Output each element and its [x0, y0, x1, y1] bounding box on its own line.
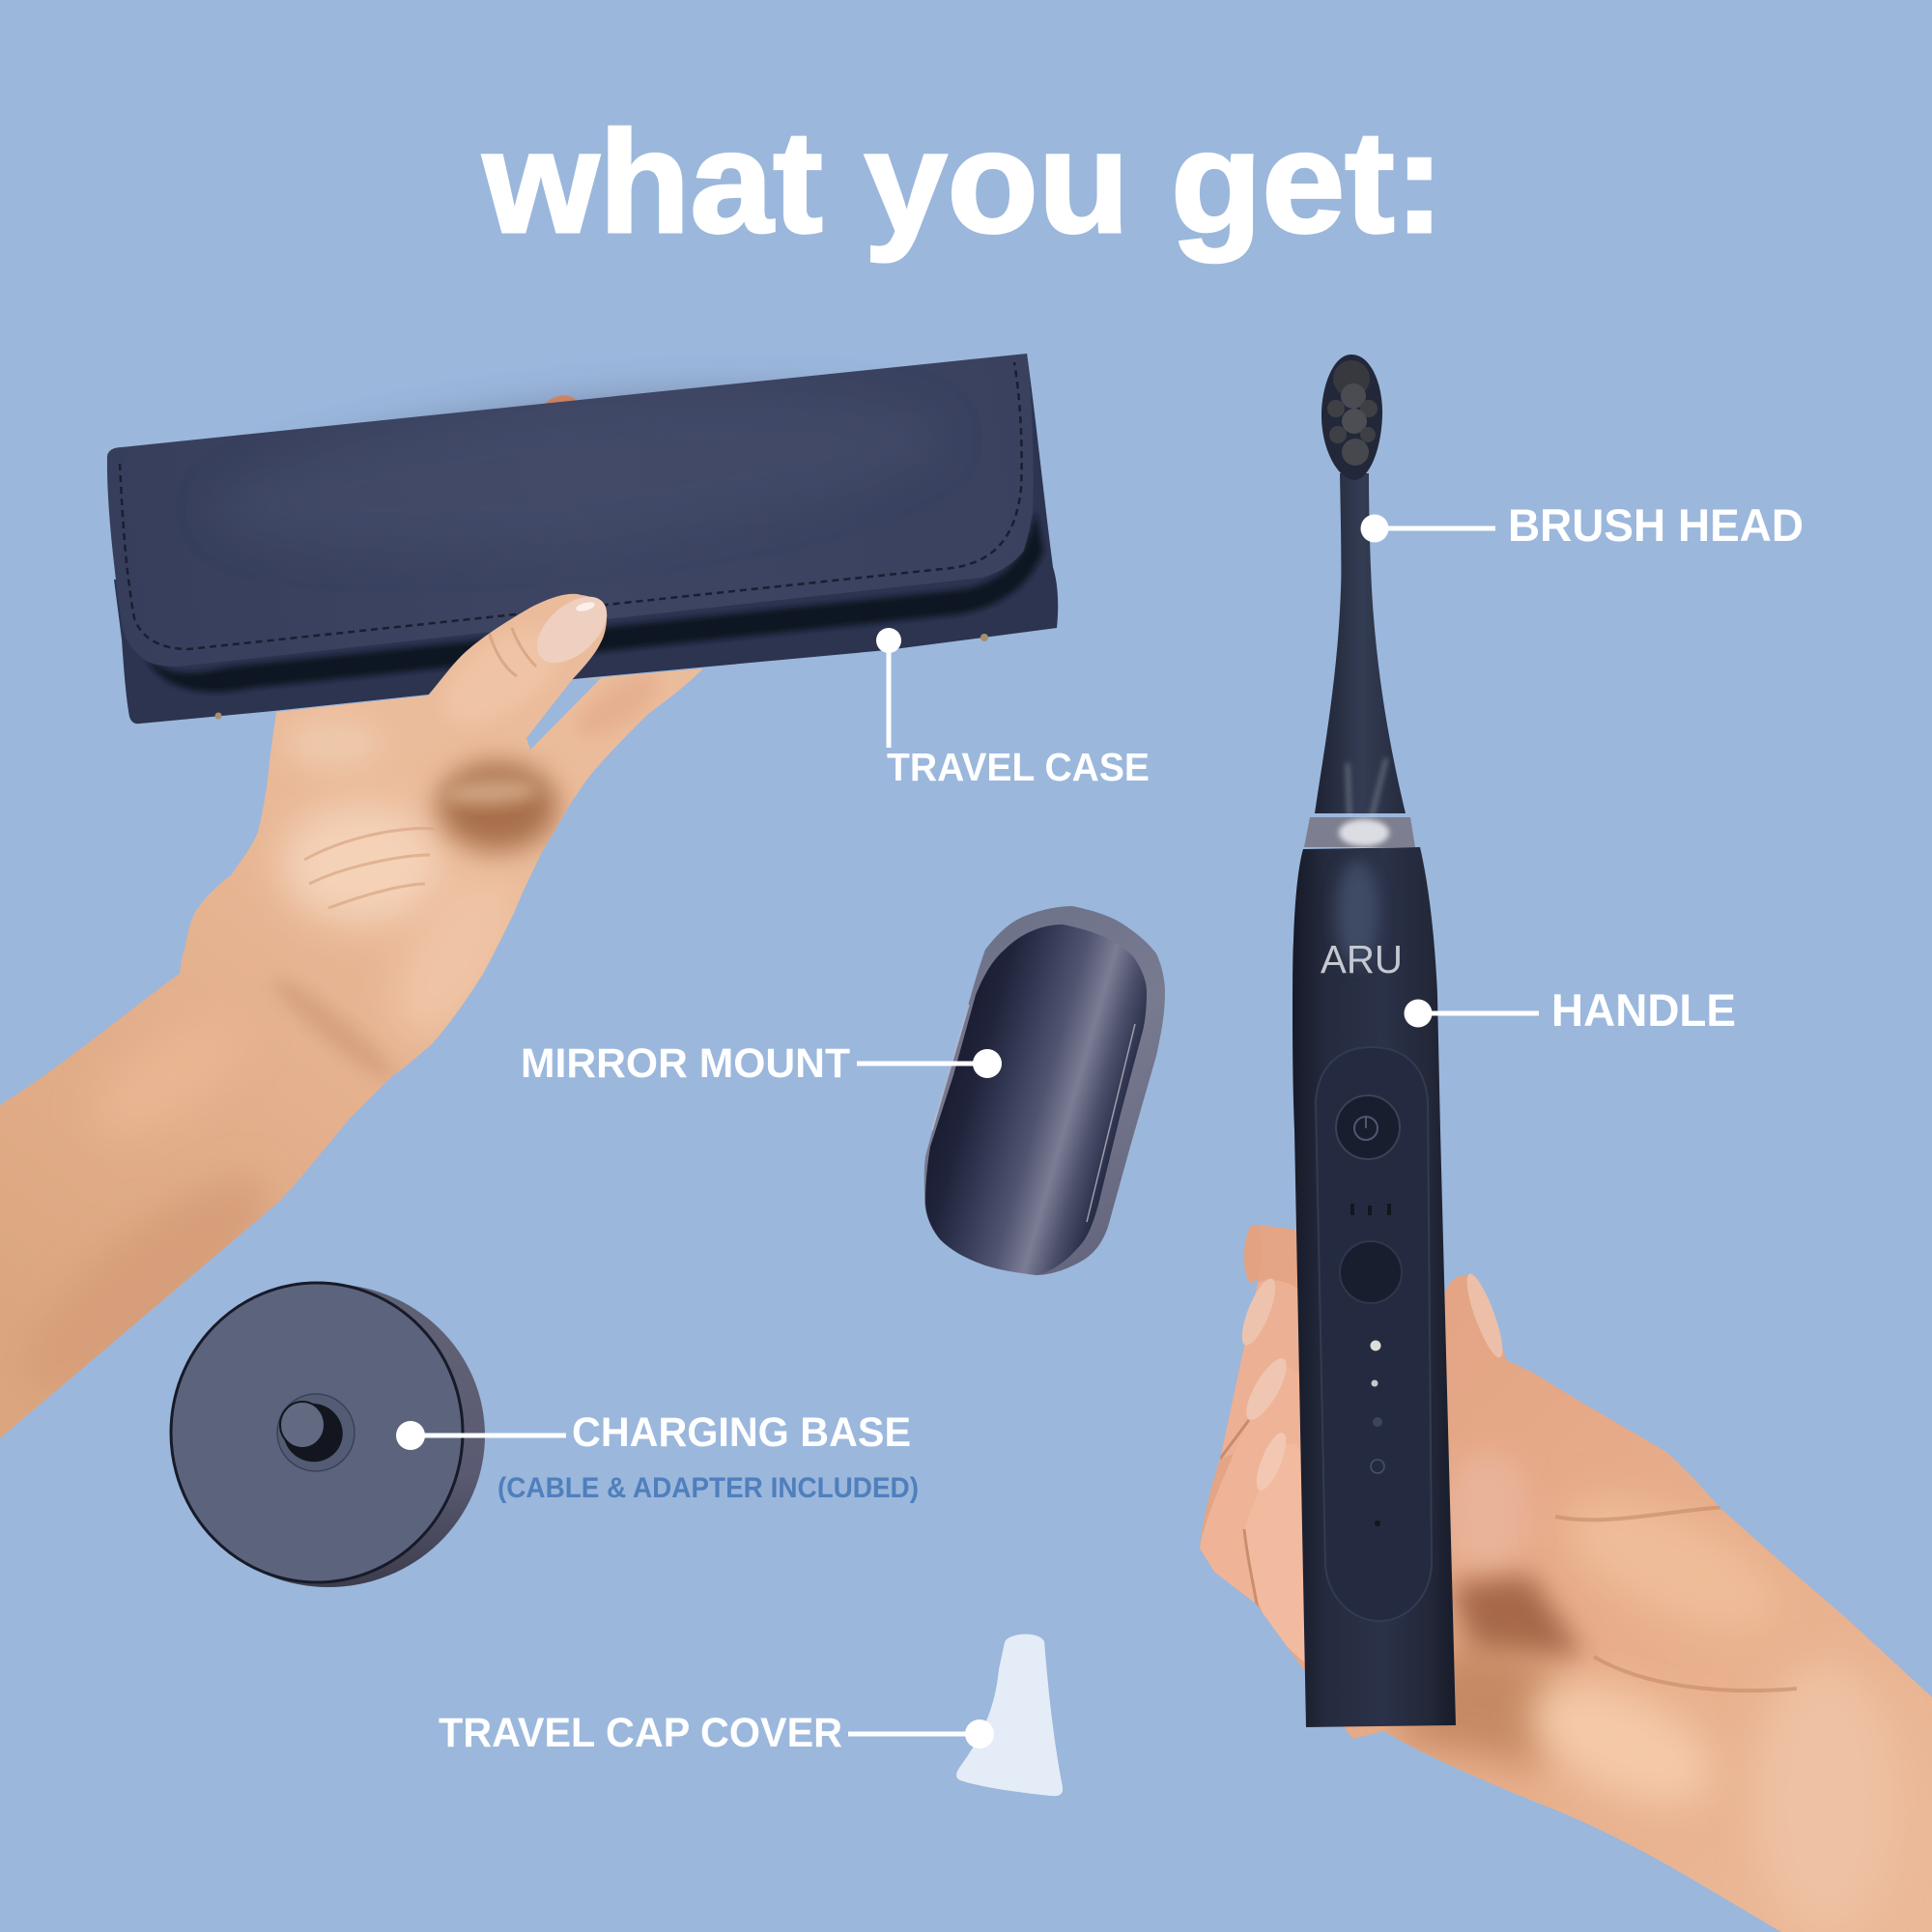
brush neck: [1315, 473, 1406, 813]
clear ring: [1304, 817, 1415, 847]
hand holding toothbrush: [1200, 1225, 1932, 1932]
flap shadow band: [145, 512, 1043, 692]
charging base: [171, 1283, 485, 1587]
travel cap cover: [956, 1634, 1063, 1796]
case lower body: [114, 354, 1058, 724]
thumb nail: [525, 584, 619, 675]
outer rim: [924, 906, 1165, 1275]
travel case: [107, 354, 1058, 724]
callout: travel case: [876, 628, 1150, 789]
toothbrush: [1293, 355, 1456, 1727]
callout: mirror mount: [521, 1040, 1002, 1087]
control panel: [1316, 1047, 1432, 1621]
callout: travel cap cover: TRAVEL CAP COVER: [439, 1710, 842, 1756]
fingers: [1221, 1281, 1299, 1458]
callout: brush head: BRUSH HEAD: [1508, 499, 1804, 551]
power button: [1336, 1095, 1400, 1159]
brush head: [1321, 355, 1382, 480]
brand logo: ARU: [1321, 937, 1403, 981]
mount face: [925, 924, 1147, 1275]
lit LED: [1370, 1341, 1381, 1350]
indicator marks: [1350, 1204, 1391, 1526]
callout: travel case: TRAVEL CASE: [887, 745, 1150, 789]
charging post: [272, 1393, 355, 1472]
callout: charging base: CHARGING BASE: [572, 1409, 911, 1456]
case flap: [107, 354, 1034, 667]
callout: handle: HANDLE: [1551, 984, 1736, 1036]
note: cable and adapter: (CABLE & ADAPTER INCLUDED): [497, 1472, 919, 1504]
fingertip peeking above case: [541, 395, 576, 411]
snaps: [214, 713, 222, 719]
light reflections on neck: [1348, 758, 1386, 816]
callout: mirror mount: MIRROR MOUNT: [521, 1040, 850, 1087]
mode button: [1340, 1241, 1402, 1303]
title: what you get:: [482, 100, 1444, 263]
handle: [1293, 847, 1456, 1727]
finger nails: [1236, 1225, 1509, 1493]
callout: brush head: [1360, 499, 1804, 551]
callout: handle: [1405, 984, 1736, 1036]
hand holding travel case: [0, 584, 703, 1438]
stitching: [120, 362, 1022, 649]
mirror mount: [924, 906, 1165, 1275]
callout: charging base: [396, 1409, 911, 1456]
gap between thumb and finger: [526, 678, 601, 750]
